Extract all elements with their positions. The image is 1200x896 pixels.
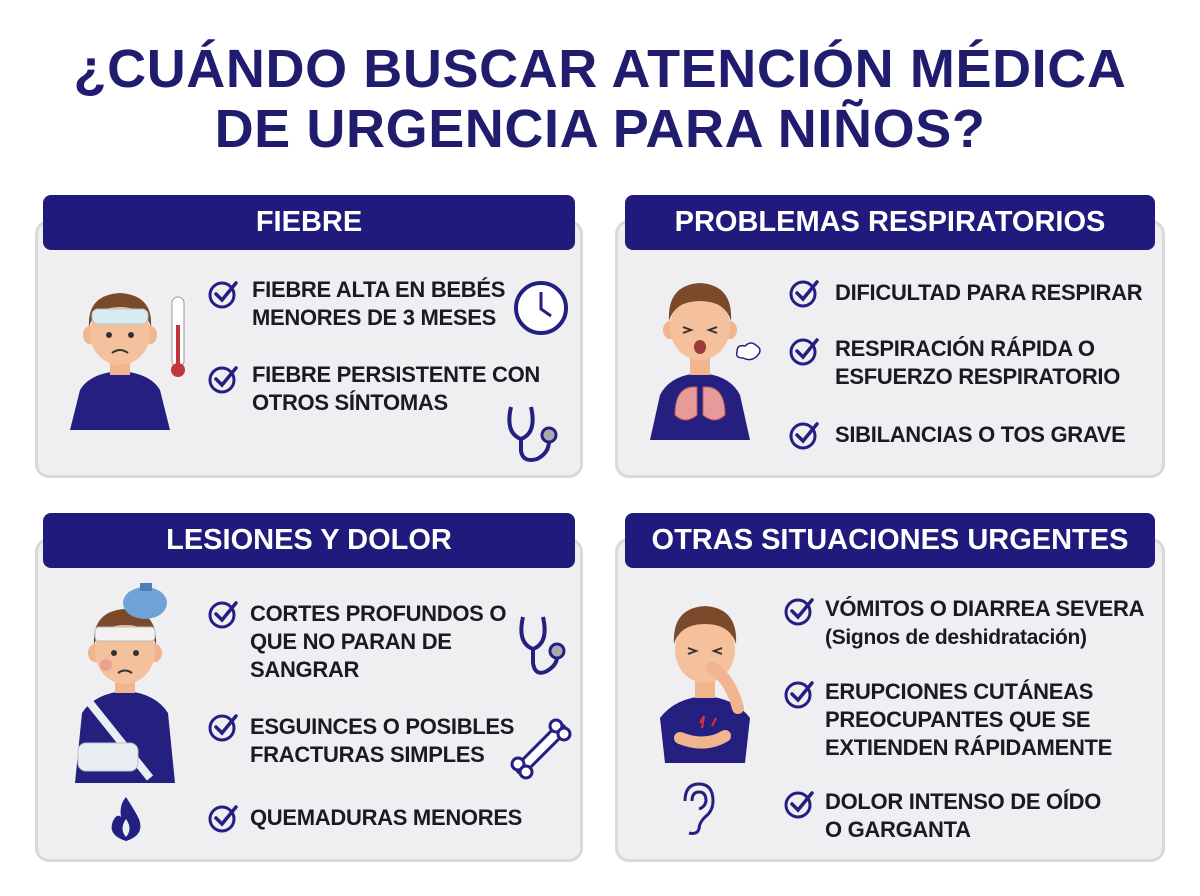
icon: child coughing with lungs: [650, 283, 750, 440]
header: lesiones: LESIONES Y DOLOR: [166, 524, 452, 556]
item 1: DIFICULTAD PARA RESPIRAR: [835, 280, 1142, 305]
item 3: O GARGANTA: [825, 817, 971, 842]
item 2: [784, 679, 1112, 760]
item 1: QUE NO PARAN DE: [250, 629, 452, 654]
item 3: [784, 789, 1101, 842]
icon: cough puff: [736, 342, 761, 360]
icon: ear: [684, 782, 714, 835]
item 1: [784, 596, 1144, 649]
item 3: DOLOR INTENSO DE OÍDO: [825, 789, 1101, 814]
icon: fire: [112, 797, 140, 841]
item 2: ESFUERZO RESPIRATORIO: [835, 364, 1120, 389]
item 3: SIBILANCIAS O TOS GRAVE: [835, 422, 1126, 447]
item 2: [790, 336, 1120, 389]
item 1: [208, 601, 506, 682]
icon: sick child with compress: [70, 293, 170, 430]
header: respiratorios: PROBLEMAS RESPIRATORIOS: [675, 206, 1105, 238]
header: lesiones: [43, 513, 575, 568]
item 1: (Signos de deshidratación): [825, 626, 1087, 649]
item 2: ERUPCIONES CUTÁNEAS: [825, 679, 1093, 704]
item 2: PREOCUPANTES QUE SE: [825, 707, 1090, 732]
title: ¿CUÁNDO BUSCAR ATENCIÓN MÉDICA: [74, 39, 1126, 99]
item 2: EXTIENDEN RÁPIDAMENTE: [825, 735, 1112, 760]
header: respiratorios: [625, 195, 1155, 250]
panel: lesiones y dolor: [35, 513, 583, 862]
item 2: [208, 362, 540, 415]
item 2: ESGUINCES O POSIBLES: [250, 714, 514, 739]
item 2: OTROS SÍNTOMAS: [252, 390, 448, 415]
title: [74, 39, 1126, 159]
item 2: FRACTURAS SIMPLES: [250, 742, 484, 767]
item 2: RESPIRACIÓN RÁPIDA O: [835, 336, 1095, 361]
item 1: SANGRAR: [250, 657, 359, 682]
item 1: VÓMITOS O DIARREA SEVERA: [825, 596, 1144, 621]
item 1: CORTES PROFUNDOS O: [250, 601, 506, 626]
header: otras: [625, 513, 1155, 568]
item 2: FIEBRE PERSISTENTE CON: [252, 362, 540, 387]
title: DE URGENCIA PARA NIÑOS?: [215, 99, 985, 159]
header: fiebre: FIEBRE: [256, 206, 362, 238]
icon: broken bone: [510, 718, 572, 780]
item 3: QUEMADURAS MENORES: [250, 805, 522, 830]
header: otras: OTRAS SITUACIONES URGENTES: [652, 524, 1128, 556]
header: fiebre: [43, 195, 575, 250]
icon: stethoscope: [519, 616, 566, 675]
panel: fiebre: [35, 195, 583, 478]
icon: nauseous child: [660, 606, 750, 763]
icon: injured child with bandage and ice pack: [75, 583, 175, 783]
item 2: [208, 714, 514, 767]
item 1: FIEBRE ALTA EN BEBÉS: [252, 277, 505, 302]
item 1: MENORES DE 3 MESES: [252, 305, 496, 330]
icon: thermometer: [171, 296, 185, 377]
icon: stethoscope: [507, 406, 558, 462]
icon: clock: [514, 281, 568, 335]
item 1: [208, 277, 505, 330]
panel: otras situaciones urgentes: [615, 513, 1165, 862]
panel: problemas respiratorios: [615, 195, 1165, 478]
